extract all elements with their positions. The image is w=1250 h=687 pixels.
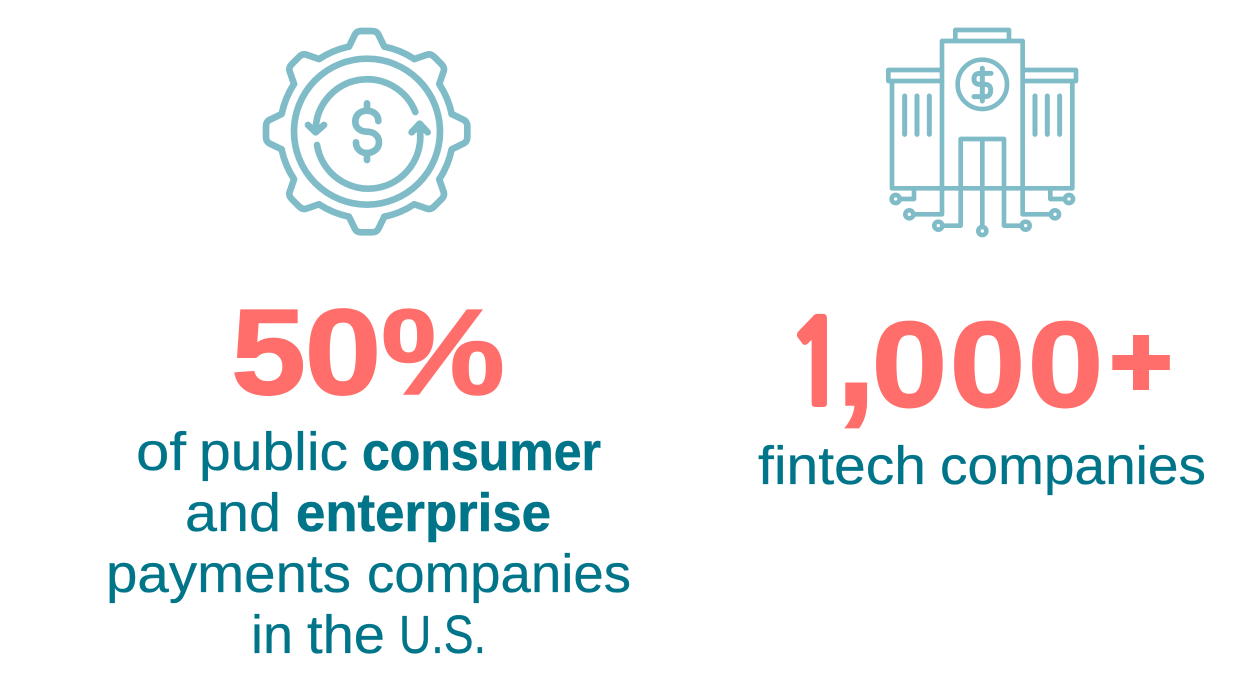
description: public payments companies: consumer [362,422,601,482]
statistic: 1,000+: 0 [872,296,948,432]
description: public payments companies: companies [367,544,631,604]
statistic: 50%: % [381,284,505,420]
description: fintech companies: companies [940,436,1206,496]
description: public payments companies: public [199,422,348,482]
statistic: 1,000+: 0 [1028,296,1104,432]
description: public payments companies: U.S. [399,605,486,665]
statistic: 50%: 5 [231,284,306,420]
description: public payments companies: the [307,605,385,665]
panel: fintech companies statistic [758,30,1206,496]
statistic: 1,000+: , [836,273,876,436]
icon: gear with circulating dollar [262,27,472,237]
statistic: 50%: 0 [304,284,382,420]
statistic: 1,000+: + [1110,306,1172,418]
description: public payments companies: of [136,422,187,482]
description: fintech companies: fintech [758,436,926,496]
statistic: 1,000+: 0 [950,296,1026,432]
statistic: 1,000+: 1 [786,307,848,422]
description: public payments companies [106,422,631,665]
description: public payments companies: in [251,605,293,665]
icon: bank building with circuit lines [888,30,1076,235]
statistic: 50% [231,284,505,420]
description: public payments companies: enterprise [296,483,551,543]
panel: consumer and enterprise payments statistic [106,27,631,665]
description: fintech companies [758,436,1206,496]
description: public payments companies: payments [106,544,351,604]
statistic: 1,000+ [786,273,1172,436]
description: public payments companies: and [185,483,281,543]
